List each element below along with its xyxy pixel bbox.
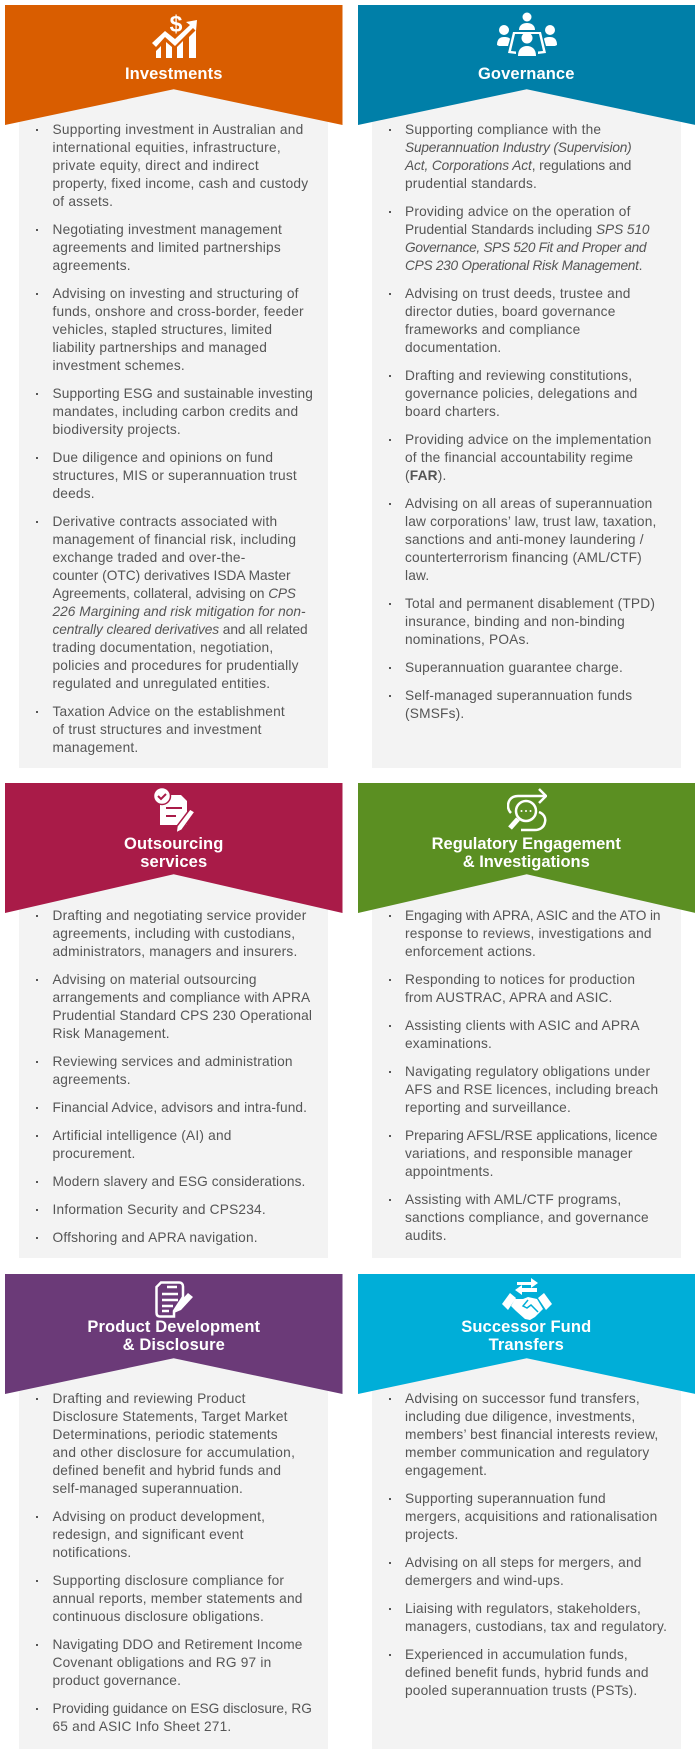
panel: Regulatory Engagement & Investigations — [358, 783, 695, 1258]
bullet list: Regulatory Engagement: Preparing AFSL/RSE applications, licence — [405, 1128, 657, 1143]
bullet list: Regulatory Engagement: examinations. — [405, 1036, 492, 1051]
header banner: Product Development & Disclosure — [5, 1274, 342, 1394]
bullet list: Regulatory Engagement — [389, 908, 660, 1243]
bullet list: Outsourcing services: agreements. — [52, 1072, 131, 1087]
bullet list: Regulatory Engagement: Navigating regulatory obligations under — [405, 1064, 650, 1079]
heading: Regulatory Engagement & Investigations: & Investigations — [463, 853, 590, 871]
bullet list: Regulatory Engagement: from AUSTRAC, APRA and ASIC. — [405, 990, 612, 1005]
heading: Product Development & Disclosure: & Disclosure — [123, 1336, 225, 1354]
bullet list: Regulatory Engagement: enforcement actions. — [405, 944, 536, 959]
bullet list: Investments: Advising on investing and structuring of — [52, 286, 299, 301]
icon: people around a table — [497, 12, 557, 56]
bullet list: Regulatory Engagement: Engaging with APRA, ASIC and the ATO in — [405, 908, 660, 923]
bullet list: Investments: centrally cleared derivatives and all related — [52, 622, 308, 637]
heading: Successor Fund Transfers: Successor Fund — [461, 1318, 591, 1336]
bullet list: Governance: Prudential Standards including SPS 510 — [405, 222, 649, 237]
heading: Outsourcing services: services — [140, 853, 207, 871]
bullet list: Outsourcing services: Prudential Standard CPS 230 Operational — [52, 1008, 312, 1023]
bullet list: Regulatory Engagement: audits. — [405, 1228, 447, 1243]
bullet list: Regulatory Engagement: Assisting with AML/CTF programs, — [405, 1192, 621, 1207]
bullet list: Investments: Agreements, collateral, advising on CPS — [52, 586, 296, 601]
bullet list: Successor Fund Transfers: members’ best financial interests review, — [405, 1427, 658, 1442]
bullet list: Governance: frameworks and compliance — [405, 322, 580, 337]
bullet list: Product Development: and other disclosure for accumulation, — [52, 1445, 295, 1460]
bullet list: Product Development: Providing guidance on ESG disclosure, RG — [52, 1701, 312, 1716]
bullet list: Successor Fund Transfers: managers, custodians, tax and regulatory. — [405, 1619, 667, 1634]
bullet list: Successor Fund Transfers: projects. — [405, 1527, 459, 1542]
bullet list: Governance: prudential standards. — [405, 176, 537, 191]
bullet list: Outsourcing services — [36, 908, 312, 1245]
bullet list: Product Development: product governance. — [52, 1673, 181, 1688]
bullet list: Product Development: Determinations, periodic statements — [52, 1427, 278, 1442]
bullet list: Product Development: continuous disclosure obligations. — [52, 1609, 264, 1624]
bullet list: Governance: (FAR). — [405, 468, 447, 483]
panel: Investments — [5, 5, 342, 768]
bullet list: Investments: trading documentation, negotiation, — [52, 640, 273, 655]
bullet list: Product Development: notifications. — [52, 1545, 131, 1560]
icon: checked document with pencil — [154, 788, 194, 832]
bullet list: Investments — [36, 122, 313, 755]
bullet list: Governance: Supporting compliance with the — [405, 122, 601, 137]
body: Regulatory list background — [372, 868, 681, 1258]
bullet list: Successor Fund Transfers: defined benefit funds, hybrid funds and — [405, 1665, 649, 1680]
heading: Outsourcing services: Outsourcing — [124, 835, 223, 853]
bullet list: Outsourcing services: Artificial intelligence (AI) and — [52, 1128, 232, 1143]
icon: magnifier with looping arrows — [507, 788, 547, 832]
bullet list: Successor Fund Transfers: demergers and wind-ups. — [405, 1573, 564, 1588]
bullet list: Investments: of assets. — [52, 194, 113, 209]
bullet list: Successor Fund Transfers: mergers, acquisitions and rationalisation — [405, 1509, 657, 1524]
bullet list: Regulatory Engagement: response to reviews, investigations and — [405, 926, 652, 941]
heading: Regulatory Engagement & Investigations: Regulatory Engagement — [432, 835, 621, 853]
bullet list: Investments: mandates, including carbon credits and — [52, 404, 298, 419]
bullet list: Investments: Supporting ESG and sustainable investing — [52, 386, 313, 401]
bullet list: Governance — [389, 122, 657, 721]
bullet list: Outsourcing services: Drafting and negotiating service provider — [52, 908, 306, 923]
body: Governance list background — [372, 84, 681, 768]
bullet list: Product Development: Advising on product development, — [52, 1509, 265, 1524]
bullet list: Successor Fund Transfers: Liaising with regulators, stakeholders, — [405, 1601, 641, 1616]
body: Investments list background — [19, 84, 328, 768]
bullet list: Regulatory Engagement: reporting and surveillance. — [405, 1100, 571, 1115]
bullet list: Investments: regulated and unregulated entities. — [52, 676, 270, 691]
body: Outsourcing list background — [19, 868, 328, 1258]
bullet list: Outsourcing services: Risk Management. — [52, 1026, 170, 1041]
panel: Governance — [358, 5, 695, 768]
bullet list: Investments: property, fixed income, cash and custody — [52, 176, 308, 191]
bullet list: Outsourcing services: arrangements and compliance with APRA — [52, 990, 310, 1005]
bullet list: Governance: law corporations’ law, trust law, taxation, — [405, 514, 657, 529]
bullet list: Investments: counter (OTC) derivatives ISDA Master — [52, 568, 291, 583]
bullet list: Investments: Taxation Advice on the establishment — [52, 704, 285, 719]
bullet list: Investments: international equities, infrastructure, — [52, 140, 281, 155]
bullet list: Governance: sanctions and anti-money laundering / — [405, 532, 644, 547]
bullet list: Governance: Self-managed superannuation funds — [405, 688, 632, 703]
body: Product list background — [19, 1353, 328, 1749]
body: Successor list background — [372, 1353, 681, 1749]
bullet list: Outsourcing services: administrators, managers and insurers. — [52, 944, 297, 959]
bullet list: Governance: nominations, POAs. — [405, 632, 530, 647]
bullet list: Governance: Act, Corporations Act, regulations and — [405, 158, 631, 173]
bullet list: Investments: Supporting investment in Australian and — [52, 122, 303, 137]
bullet list: Product Development: 65 and ASIC Info Sheet 271. — [52, 1719, 231, 1734]
panel: Successor Fund Transfers — [358, 1274, 695, 1749]
bullet list: Product Development: defined benefit and hybrid funds and — [52, 1463, 281, 1478]
heading: Successor Fund Transfers: Transfers — [489, 1336, 564, 1354]
bullet list: Product Development: Disclosure Statements, Target Market — [52, 1409, 288, 1424]
bullet list: Investments: management. — [52, 740, 138, 755]
bullet list: Investments: Due diligence and opinions on fund — [52, 450, 273, 465]
bullet list: Investments: funds, onshore and cross-border, feeder — [52, 304, 304, 319]
heading: Regulatory Engagement & Investigations — [432, 835, 621, 871]
bullet list: Regulatory Engagement: Responding to notices for production — [405, 972, 635, 987]
bullet list: Outsourcing services: Information Security and CPS234. — [52, 1202, 266, 1217]
bullet list: Investments: management of financial risk, including — [52, 532, 296, 547]
header banner: Governance — [358, 5, 695, 125]
bullet list: Successor Fund Transfers: Advising on successor fund transfers, — [405, 1391, 640, 1406]
icon: growth chart with dollar — [152, 11, 197, 58]
bullet list: Product Development: redesign, and significant event — [52, 1527, 244, 1542]
bullet list: Governance: Superannuation Industry (Supervision) — [405, 140, 632, 155]
bullet list: Governance: of the financial accountability regime — [405, 450, 633, 465]
bullet list: Governance: CPS 230 Operational Risk Management. — [405, 258, 643, 273]
bullet list: Successor Fund Transfers — [389, 1391, 667, 1698]
bullet list: Governance: governance policies, delegations and — [405, 386, 637, 401]
bullet list: Governance: Advising on all areas of superannuation — [405, 496, 652, 511]
bullet list: Governance: (SMSFs). — [405, 706, 464, 721]
panel: Outsourcing services — [5, 783, 342, 1258]
bullet list: Investments: of trust structures and investment — [52, 722, 262, 737]
bullet list: Outsourcing services: Offshoring and APRA navigation. — [52, 1230, 258, 1245]
bullet list: Investments: 226 Margining and risk mitigation for non- — [52, 604, 306, 619]
bullet list: Product Development — [36, 1391, 312, 1734]
bullet list: Governance: documentation. — [405, 340, 501, 355]
bullet list: Governance: Governance, SPS 520 Fit and Proper and — [405, 240, 646, 255]
bullet list: Investments: vehicles, stapled structures, limited — [52, 322, 272, 337]
bullet list: Investments: investment schemes. — [52, 358, 185, 373]
bullet list: Investments: private equity, direct and indirect — [52, 158, 259, 173]
bullet list: Investments: deeds. — [52, 486, 95, 501]
bullet list: Product Development: annual reports, member statements and — [52, 1591, 303, 1606]
bullet list: Product Development: self-managed superannuation. — [52, 1481, 243, 1496]
bullet list: Governance: Providing advice on the implementation — [405, 432, 652, 447]
bullet list: Investments: exchange traded and over-the- — [52, 550, 246, 565]
heading: Governance: Governance — [478, 65, 575, 83]
bullet list: Governance: law. — [405, 568, 429, 583]
header banner: Outsourcing services — [5, 783, 342, 913]
bullet list: Regulatory Engagement: AFS and RSE licences, including breach — [405, 1082, 658, 1097]
header banner: Regulatory Engagement & Investigations — [358, 783, 695, 913]
bullet list: Governance: Total and permanent disablement (TPD) — [405, 596, 655, 611]
bullet list: Governance: Advising on trust deeds, trustee and — [405, 286, 631, 301]
bullet list: Regulatory Engagement: appointments. — [405, 1164, 494, 1179]
bullet list: Product Development: Covenant obligations and RG 97 in — [52, 1655, 271, 1670]
bullet list: Investments: agreements and limited partnerships — [52, 240, 281, 255]
bullet list: Investments: biodiversity projects. — [52, 422, 181, 437]
bullet list: Product Development: Navigating DDO and Retirement Income — [52, 1637, 303, 1652]
header banner: Investments — [5, 5, 342, 125]
bullet list: Governance: insurance, binding and non-binding — [405, 614, 625, 629]
bullet list: Investments: policies and procedures for prudentially — [52, 658, 299, 673]
bullet list: Successor Fund Transfers: Experienced in accumulation funds, — [405, 1647, 628, 1662]
icon: handshake with transfer arrows — [502, 1278, 552, 1320]
bullet list: Outsourcing services: Financial Advice, advisors and intra-fund. — [52, 1100, 307, 1115]
bullet list: Product Development: Drafting and reviewing Product — [52, 1391, 246, 1406]
bullet list: Successor Fund Transfers: engagement. — [405, 1463, 487, 1478]
icon: growth chart with dollar: $ — [170, 11, 183, 37]
bullet list: Regulatory Engagement: variations, and responsible manager — [405, 1146, 633, 1161]
heading: Investments: Investments — [125, 65, 223, 83]
heading: Product Development & Disclosure — [87, 1318, 260, 1354]
bullet list: Governance: board charters. — [405, 404, 500, 419]
header banner: Successor Fund Transfers — [358, 1274, 695, 1394]
bullet list: Outsourcing services: Modern slavery and ESG considerations. — [52, 1174, 305, 1189]
heading: Product Development & Disclosure: Product Development — [87, 1318, 260, 1336]
heading: Successor Fund Transfers — [461, 1318, 591, 1354]
bullet list: Governance: counterterrorism financing (AML/CTF) — [405, 550, 642, 565]
bullet list: Investments: structures, MIS or superannuation trust — [52, 468, 297, 483]
bullet list: Regulatory Engagement: sanctions compliance, and governance — [405, 1210, 649, 1225]
bullet list: Investments: Derivative contracts associated with — [52, 514, 277, 529]
bullet list: Successor Fund Transfers: member communication and regulatory — [405, 1445, 649, 1460]
heading: Outsourcing services — [124, 835, 223, 871]
bullet list: Governance: Drafting and reviewing constitutions, — [405, 368, 632, 383]
bullet list: Product Development: Supporting disclosure compliance for — [52, 1573, 284, 1588]
bullet list: Successor Fund Transfers: Advising on all steps for mergers, and — [405, 1555, 642, 1570]
bullet list: Regulatory Engagement: Assisting clients with ASIC and APRA — [405, 1018, 640, 1033]
bullet list: Outsourcing services: Advising on material outsourcing — [52, 972, 257, 987]
bullet list: Outsourcing services: Reviewing services and administration — [52, 1054, 293, 1069]
bullet list: Successor Fund Transfers: including due diligence, investments, — [405, 1409, 635, 1424]
bullet list: Investments: agreements. — [52, 258, 131, 273]
bullet list: Investments: Negotiating investment management — [52, 222, 282, 237]
panel: Product Development & Disclosure — [5, 1274, 342, 1749]
bullet list: Governance: Providing advice on the operation of — [405, 204, 631, 219]
bullet list: Governance: director duties, board governance — [405, 304, 616, 319]
bullet list: Outsourcing services: procurement. — [52, 1146, 136, 1161]
bullet list: Successor Fund Transfers: Supporting superannuation fund — [405, 1491, 606, 1506]
bullet list: Successor Fund Transfers: pooled superannuation trusts (PSTs). — [405, 1683, 637, 1698]
bullet list: Investments: liability partnerships and managed — [52, 340, 267, 355]
icon: clipboard with pencil — [155, 1281, 193, 1318]
bullet list: Outsourcing services: agreements, including with custodians, — [52, 926, 295, 941]
bullet list: Governance: Superannuation guarantee charge. — [405, 660, 623, 675]
